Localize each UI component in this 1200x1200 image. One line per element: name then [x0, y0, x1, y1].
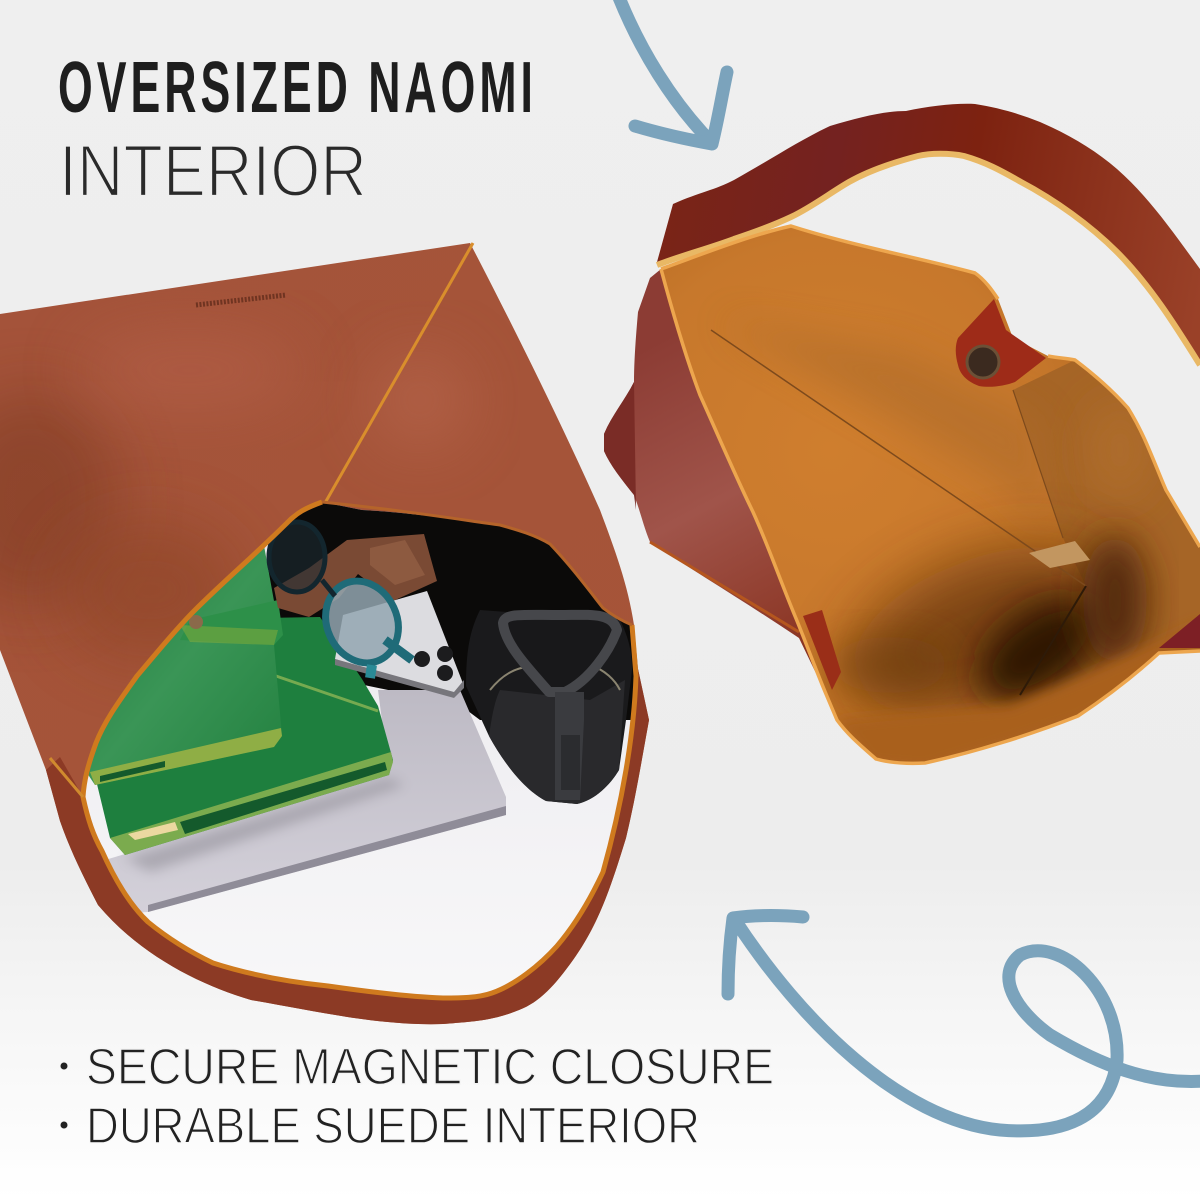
- seam: [325, 243, 473, 503]
- phone: [335, 591, 464, 698]
- left bag: contents in open leather bag: [0, 243, 650, 1024]
- right bag: open suede interior view: [604, 104, 1200, 780]
- bag outer leather: [0, 243, 649, 1024]
- scrunchie: [274, 534, 437, 617]
- lower tab: [803, 610, 841, 690]
- suede interior: [650, 220, 1200, 780]
- right maroon tip: [1159, 614, 1200, 648]
- title: [58, 47, 533, 212]
- glasses: [269, 522, 412, 678]
- arrow: top blue arrow pointing to open bag: [618, 0, 727, 144]
- green wallet lower: [96, 617, 393, 855]
- green wallet upper: [85, 540, 282, 785]
- handle inner edge: [657, 154, 1200, 365]
- pocket seam: [711, 330, 1086, 586]
- bullet list: DURABLE SUEDE INTERIOR: [86, 1097, 700, 1154]
- bottom lip: [842, 641, 1196, 762]
- bottom leather edge: [650, 542, 799, 632]
- dark mottled band: [780, 335, 1042, 500]
- leather shading: [0, 379, 442, 652]
- embossed stamp mark: [196, 295, 286, 305]
- magnetic closure tab: [956, 299, 1046, 387]
- snap: [967, 346, 999, 378]
- darker leather lobe: [604, 382, 636, 510]
- water bottle: [466, 610, 632, 804]
- laptop: [100, 690, 506, 915]
- bullet list: [60, 1038, 774, 1154]
- handle pebbled band: [46, 669, 649, 1024]
- bag opening interior: [70, 500, 650, 1010]
- title: INTERIOR: [59, 131, 367, 212]
- button on strap: [189, 615, 203, 629]
- arrow: bottom blue looping arrow pointing to left bag: [728, 916, 1200, 1131]
- title: OVERSIZED NAOMI: [58, 47, 533, 128]
- bullet list: SECURE MAGNETIC CLOSURE: [86, 1038, 774, 1095]
- pocket tag: [1029, 541, 1090, 568]
- lower shadow on laptop: [125, 778, 405, 872]
- suede rim: [661, 226, 1200, 763]
- dark back: [265, 500, 640, 720]
- deep shadow: [960, 577, 1120, 723]
- opening stitched edge: [83, 502, 636, 998]
- right wall: [1014, 362, 1200, 636]
- broad lower shade: [826, 516, 1094, 717]
- outer leather side: [604, 269, 826, 694]
- white floor: [70, 500, 650, 1010]
- handle: [657, 104, 1200, 365]
